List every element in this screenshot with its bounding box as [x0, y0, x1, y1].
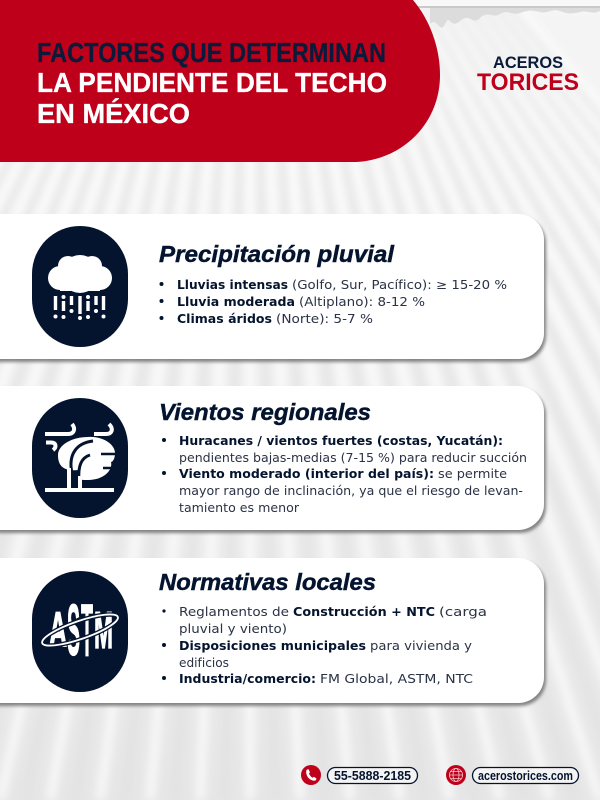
title: LA PENDIENTE DEL TECHO: [37, 67, 387, 98]
icon: phone: [301, 765, 321, 785]
list: FM Global, ASTM, NTC: [320, 672, 473, 686]
list: Viento moderado (interior del país):: [179, 467, 434, 481]
list: (Golfo, Sur, Pacífico): ≥ 15-20 %: [292, 278, 507, 292]
panel: normativas locales: [0, 558, 544, 703]
icon: ASTM logo: A: [49, 603, 67, 657]
heading: Vientos regionales: [159, 399, 371, 425]
list: mayor rango de inclinación, ya que el riesgo de levan-: [179, 484, 523, 498]
list: (Norte): 5-7 %: [276, 312, 373, 326]
list: Huracanes / vientos fuertes (costas, Yucatán):: [179, 434, 503, 448]
panel: precipitación pluvial: [0, 214, 544, 359]
list: pluvial y viento): [179, 622, 287, 636]
panel: vientos regionales: [0, 386, 544, 530]
contact: phone: [301, 765, 418, 785]
contact: website: [446, 765, 578, 785]
list: (carga: [439, 605, 487, 619]
title: [37, 37, 387, 129]
icon: ASTM logo: T: [81, 589, 93, 672]
list: pendientes bajas-medias (7-15 %) para reducir succión: [179, 451, 527, 465]
list: para vivienda y: [370, 639, 472, 653]
heading: Precipitación pluvial: [159, 241, 394, 267]
logo: Aceros Torices: TORICES: [477, 69, 579, 96]
list: Reglamentos de: [179, 605, 289, 619]
list: Construcción + NTC: [293, 605, 435, 619]
logo: Aceros Torices: ACEROS: [493, 54, 563, 72]
list: Industria/comercio:: [179, 672, 316, 686]
list: (Altiplano): 8-12 %: [299, 295, 425, 309]
list: Climas áridos: [177, 312, 272, 326]
icon: tree in wind: [32, 398, 128, 518]
list: Lluvias intensas: [177, 278, 288, 292]
icon: globe: [446, 765, 466, 785]
list: [162, 434, 527, 515]
heading: Normativas locales: [159, 569, 376, 595]
list: [160, 278, 507, 326]
list: Disposiciones municipales: [179, 639, 366, 653]
list: edificios: [179, 656, 229, 670]
list: Lluvia moderada: [177, 295, 295, 309]
contact: website: acerostorices.com: [478, 768, 573, 783]
contact: phone: 55-5888-2185: [334, 768, 411, 783]
title: FACTORES QUE DETERMINAN: [37, 37, 386, 68]
icon: rain cloud: [32, 226, 128, 347]
list: se permite: [438, 467, 507, 481]
title: EN MÉXICO: [37, 98, 190, 129]
icon: ASTM logo: [32, 571, 128, 692]
icon: ASTM logo: S: [67, 591, 80, 671]
list: [162, 605, 487, 686]
list: tamiento es menor: [179, 501, 300, 515]
header: red title banner: [0, 0, 440, 162]
logo: Aceros Torices: [477, 54, 579, 96]
icon: ASTM logo: M: [94, 602, 113, 660]
